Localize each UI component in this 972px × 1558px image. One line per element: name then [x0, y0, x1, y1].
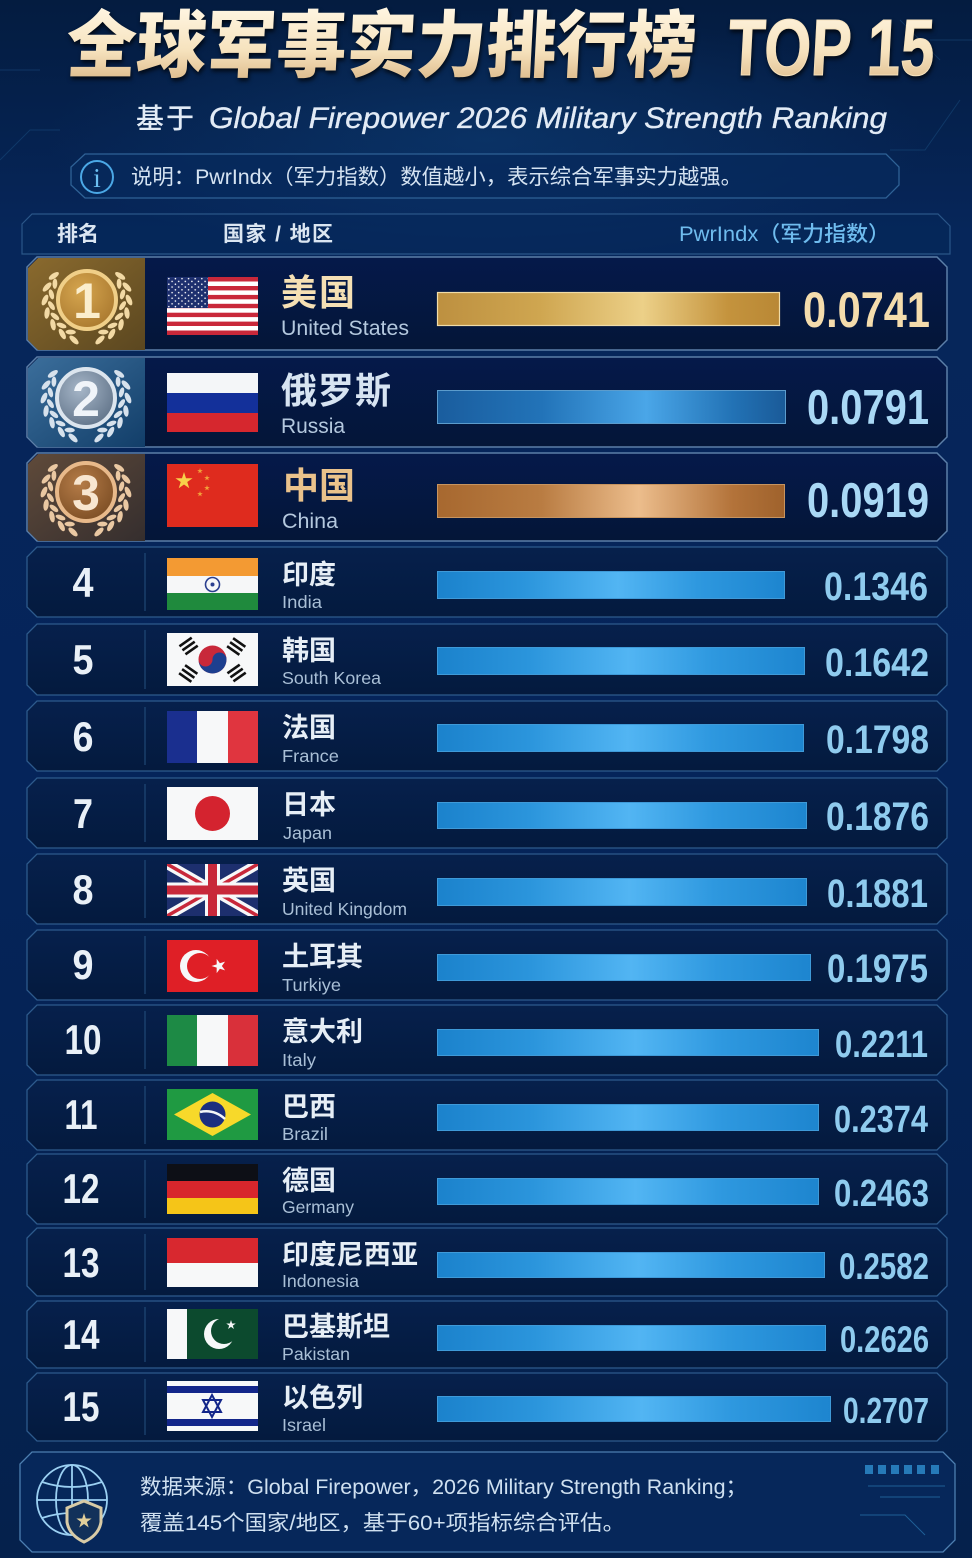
value: 0.1876: [826, 795, 929, 839]
table header: 国家 / 地区: [223, 222, 333, 246]
value: 0.2582: [839, 1246, 929, 1287]
bar: [438, 878, 806, 906]
value: 0.0919: [807, 474, 929, 528]
medal 2: [28, 358, 145, 447]
value: 0.0741: [803, 282, 930, 338]
flag: South Korea: [167, 633, 258, 686]
rank: 10: [64, 1016, 102, 1063]
name: Japan: [283, 823, 332, 843]
name: [282, 465, 355, 533]
value: 0.1975: [827, 947, 928, 991]
rank: 4: [72, 559, 94, 606]
row 7: Japan: [27, 778, 947, 848]
bar: [438, 724, 804, 752]
row 2: Russia: [27, 357, 947, 447]
name: Italy: [282, 1050, 316, 1070]
bar: [438, 1326, 826, 1350]
medal 3: 3: [72, 465, 100, 521]
flag: Japan: [167, 787, 258, 840]
source text: [140, 1476, 747, 1535]
value: 0.2463: [834, 1173, 929, 1215]
value: 0.2626: [840, 1319, 929, 1360]
bar: [438, 802, 806, 828]
value: 0.1881: [827, 872, 928, 916]
name: 日本: [282, 790, 336, 820]
title: [64, 3, 937, 92]
name: 印度: [282, 560, 336, 590]
name: 意大利: [282, 1017, 363, 1047]
name: 俄罗斯: [281, 370, 391, 411]
note text: 说明：PwrIndx（军力指数）数值越小，表示综合军事实力越强。: [131, 166, 742, 189]
bar: [438, 390, 786, 424]
bar: [438, 1030, 818, 1056]
rank: 14: [62, 1311, 100, 1358]
name: Turkiye: [282, 975, 341, 995]
value: 0.2211: [835, 1024, 928, 1066]
row 10: Italy: [27, 1005, 947, 1075]
row 12: Germany: [27, 1154, 947, 1224]
rank: 12: [62, 1165, 100, 1212]
row 3: China: [27, 453, 947, 541]
row 13: Indonesia: [27, 1228, 947, 1296]
flag: Israel: [167, 1381, 258, 1431]
flag: Italy: [167, 1015, 258, 1066]
flag: Germany: [167, 1164, 258, 1214]
table header: PwrIndx（军力指数）: [679, 223, 890, 246]
icon: globe and shield: [37, 1465, 107, 1542]
rank: 8: [72, 866, 94, 913]
row 9: Turkiye: [27, 930, 947, 1000]
name: China: [282, 510, 338, 533]
row 14: Pakistan: [27, 1301, 947, 1368]
rank: 7: [73, 790, 93, 837]
value: 0.0791: [807, 381, 929, 435]
flag: Russia: [167, 373, 258, 432]
bar: [438, 292, 780, 326]
row 15: Israel: [27, 1373, 947, 1441]
name: Russia: [281, 415, 345, 438]
source text: 数据来源：Global Firepower，2026 Military Strength Ranking；: [140, 1476, 747, 1499]
name: [281, 370, 391, 438]
medal 1: 1: [73, 273, 101, 329]
flag: UK: [167, 864, 258, 916]
name: 土耳其: [282, 942, 363, 972]
medal 2: 2: [72, 371, 100, 427]
name: Brazil: [282, 1124, 328, 1144]
rank: 9: [72, 941, 94, 988]
icon: info: [81, 161, 113, 193]
name: [282, 1166, 354, 1217]
value: 0.1798: [826, 718, 929, 762]
name: 巴基斯坦: [282, 1312, 390, 1342]
name: [282, 1092, 336, 1144]
name: United States: [281, 317, 409, 340]
name: [282, 790, 336, 843]
name: 中国: [283, 465, 355, 506]
note bar: [71, 154, 899, 198]
name: [282, 1383, 363, 1435]
name: [282, 713, 339, 766]
value: 0.1346: [824, 565, 928, 609]
flag: Pakistan: [167, 1309, 258, 1359]
row 6: France: [27, 701, 947, 771]
bar: [438, 954, 810, 980]
name: France: [282, 746, 339, 766]
rank: 11: [64, 1091, 98, 1138]
rank: 13: [62, 1239, 100, 1286]
value: 0.2707: [843, 1390, 929, 1431]
rank: 5: [72, 636, 94, 683]
bar: [438, 1252, 824, 1278]
table header: [22, 214, 950, 254]
source text: 覆盖145个国家/地区，基于60+项指标综合评估。: [140, 1512, 625, 1535]
bar: [438, 572, 784, 598]
flag: France: [167, 711, 258, 763]
bar: [438, 1178, 818, 1204]
name: [282, 866, 407, 919]
bar: [438, 484, 784, 518]
row 1: United States: [27, 257, 947, 350]
row 5: South Korea: [27, 624, 947, 695]
flag: USA: [167, 277, 258, 335]
subtitle: Global Firepower 2026 Military Strength Ranking: [209, 102, 887, 135]
name: South Korea: [282, 668, 381, 688]
name: [282, 942, 363, 995]
name: [282, 560, 336, 612]
name: 德国: [282, 1166, 336, 1196]
flag: Indonesia: [167, 1238, 258, 1287]
name: [282, 1017, 363, 1070]
icon: info: i: [93, 163, 101, 193]
name: Israel: [282, 1415, 326, 1435]
flag: Turkey: [167, 940, 258, 992]
name: United Kingdom: [282, 899, 407, 919]
medal 3: [28, 454, 145, 541]
name: 巴西: [282, 1092, 336, 1122]
name: [282, 1240, 418, 1291]
flag: China: [167, 464, 258, 527]
table header: 排名: [57, 223, 99, 246]
name: [282, 636, 381, 688]
row 4: India: [27, 547, 947, 617]
name: Pakistan: [282, 1344, 350, 1364]
name: 法国: [282, 713, 336, 743]
name: [282, 1312, 390, 1364]
row 11: Brazil: [27, 1080, 947, 1150]
name: Indonesia: [282, 1271, 359, 1291]
medal 1: [28, 258, 145, 350]
title: 全球军事实力排行榜: [64, 6, 699, 87]
name: India: [282, 592, 322, 612]
name: 以色列: [282, 1383, 363, 1413]
row 8: United Kingdom: [27, 854, 947, 924]
subtitle: 基于: [136, 103, 194, 134]
value: 0.2374: [834, 1099, 928, 1141]
footer panel: [20, 1452, 955, 1552]
rank: 6: [72, 713, 94, 760]
flag: India: [167, 558, 258, 610]
name: 印度尼西亚: [282, 1240, 418, 1270]
name: Germany: [282, 1197, 354, 1217]
name: 美国: [281, 272, 355, 313]
name: 英国: [282, 866, 336, 896]
value: 0.1642: [825, 641, 929, 685]
bar: [438, 1396, 830, 1422]
rank: 15: [62, 1383, 100, 1430]
flag: Brazil: [167, 1089, 258, 1140]
name: [281, 272, 409, 340]
bar: [438, 1104, 818, 1130]
bar: [438, 648, 804, 674]
name: 韩国: [282, 636, 336, 666]
